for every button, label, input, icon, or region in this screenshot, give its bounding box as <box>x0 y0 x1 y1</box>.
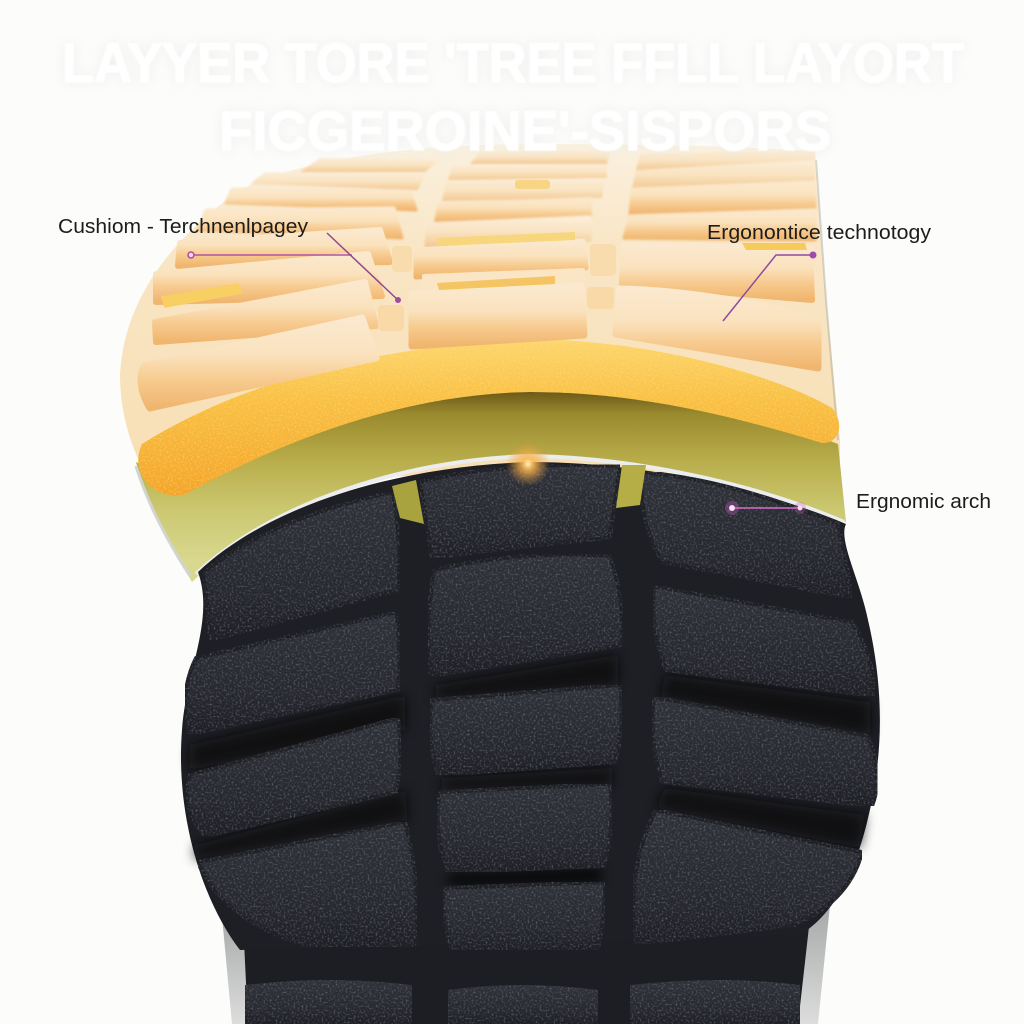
black outsole <box>181 462 880 950</box>
label: ergonomic arch <box>725 491 991 515</box>
title: FICGEROINE'-SISPORS <box>219 99 831 162</box>
label: ergonomic technology <box>707 222 931 321</box>
outsole lugs <box>185 465 877 950</box>
yellow foam layer <box>138 339 839 496</box>
cushion pads <box>141 150 818 408</box>
label: ergonomic arch: Ergnomic arch <box>856 491 991 513</box>
olive mid layer <box>136 392 846 582</box>
lower heel sole <box>220 885 832 1024</box>
label: cushion technology: Cushiom - Terchnenlpagey <box>58 216 308 238</box>
glow marker <box>506 442 550 486</box>
title <box>62 31 964 162</box>
label: ergonomic technology: Ergonontice technotogy <box>707 222 931 244</box>
title: LAYYER TORE 'TREE FFLL LAYORT <box>62 31 964 94</box>
cushion base layer <box>120 144 840 480</box>
label: cushion technology <box>58 216 401 303</box>
